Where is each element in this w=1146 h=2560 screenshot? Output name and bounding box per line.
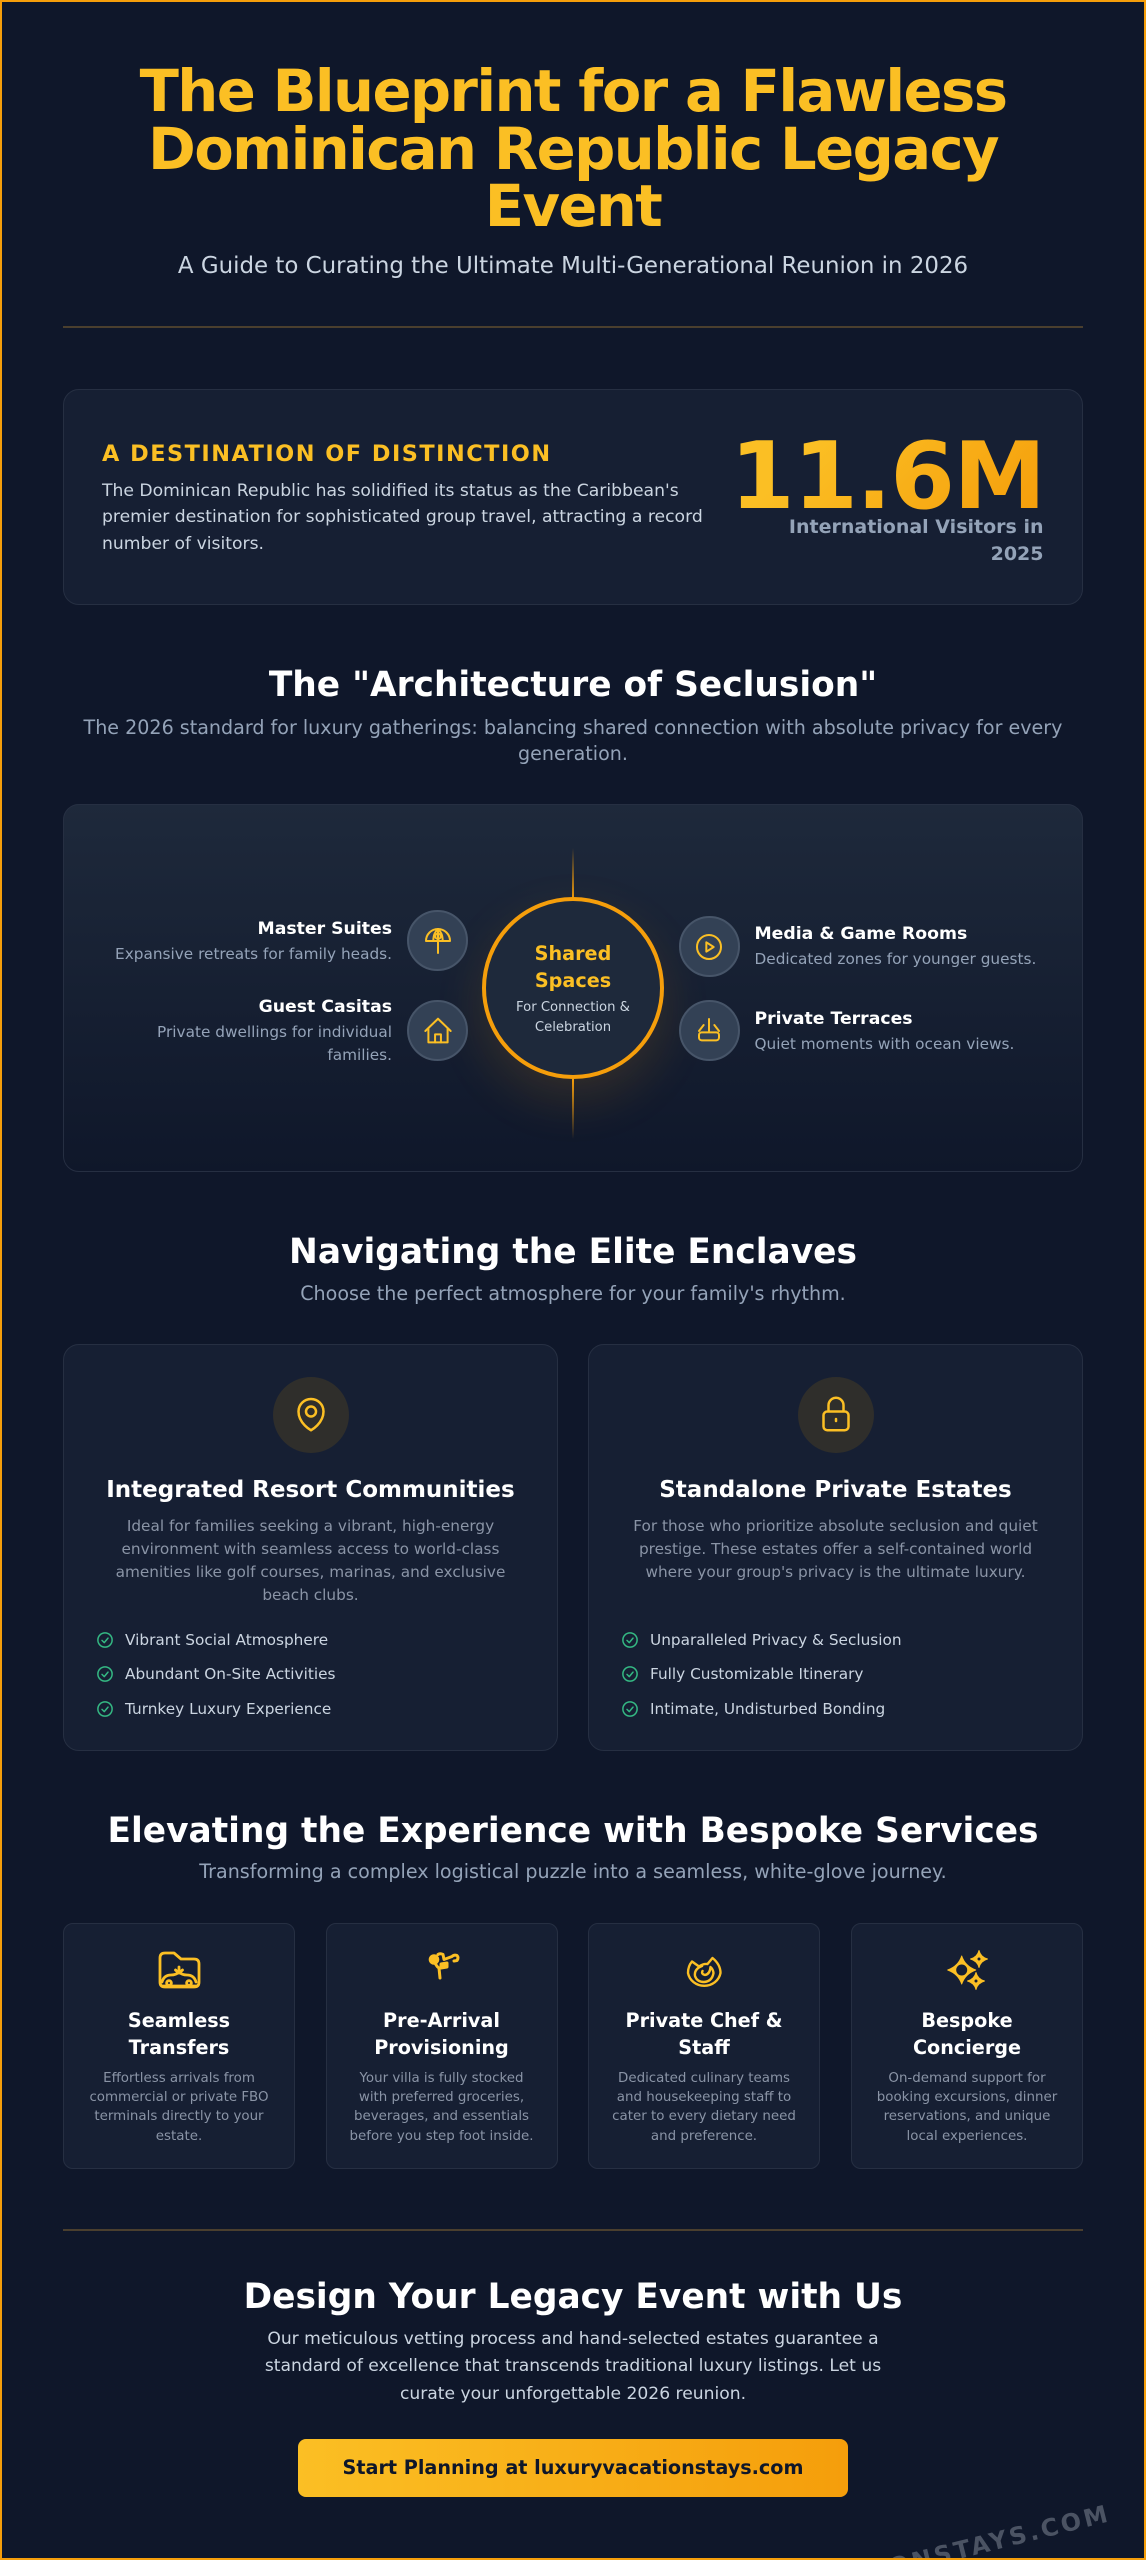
- title: Event: [485, 173, 661, 240]
- title: Dominican Republic Legacy: [148, 116, 998, 183]
- card description: terminals directly to your: [94, 2109, 264, 2124]
- check item: Intimate, Undisturbed Bonding: [650, 1700, 885, 1718]
- heading: bespoke services: Elevating the Experience with Bespoke Services: [108, 1811, 1038, 1851]
- text: closing paragraph: standard of excellence that transcends traditional luxury listings. Let us: [265, 2356, 881, 2376]
- card description: [877, 2071, 1058, 2144]
- panel: standalone private estates: [588, 1344, 1083, 1751]
- item: guest casitas: Private dwellings for individual: [157, 1022, 392, 1040]
- card title: [374, 2009, 509, 2059]
- card title: Concierge: [913, 2036, 1021, 2059]
- card description: and housekeeping staff to: [617, 2090, 791, 2105]
- text: architecture subtitle: [83, 716, 1062, 765]
- text: closing paragraph: Our meticulous vetting process and hand-selected estates guarantee a: [267, 2328, 879, 2348]
- item: guest casitas: [157, 996, 392, 1064]
- title: The Blueprint for a Flawless: [140, 58, 1006, 125]
- card description: cater to every dietary need: [612, 2109, 796, 2124]
- stat label: International Visitors in: [789, 516, 1044, 538]
- card description: prestige. These estates offer a self-contained world: [639, 1540, 1032, 1558]
- item: media and game rooms: Media & Game Rooms: [754, 924, 967, 944]
- check item: Turnkey Luxury Experience: [125, 1700, 331, 1718]
- card description: amenities like golf courses, marinas, and exclusive: [116, 1562, 505, 1580]
- connector: top line: [572, 848, 574, 900]
- text: closing paragraph: curate your unforgettable 2026 reunion.: [400, 2384, 746, 2404]
- card title: Standalone Private Estates: [659, 1477, 1012, 1503]
- card description: [633, 1516, 1038, 1580]
- card title: Bespoke: [921, 2009, 1013, 2032]
- check item: Vibrant Social Atmosphere: [125, 1631, 328, 1649]
- card title: Pre-Arrival: [383, 2009, 500, 2032]
- button: start planning: [298, 2439, 848, 2497]
- card description: where your group's privacy is the ultimate luxury.: [645, 1562, 1026, 1580]
- icon: play: [678, 916, 740, 977]
- central caption: For Connection &: [516, 1000, 630, 1015]
- check item: Fully Customizable Itinerary: [650, 1665, 863, 1683]
- card title: Integrated Resort Communities: [106, 1477, 515, 1503]
- card description: [89, 2071, 269, 2144]
- central circle: shared spaces: [482, 897, 664, 1079]
- panel: pre-arrival provisioning: [326, 1923, 558, 2169]
- check item: Unparalleled Privacy & Seclusion: [650, 1631, 902, 1649]
- card title: [626, 2009, 782, 2059]
- card description: local experiences.: [907, 2129, 1027, 2144]
- card description: commercial or private FBO: [89, 2090, 269, 2105]
- check item: Abundant On-Site Activities: [125, 1665, 335, 1683]
- icon: sparkles: [947, 1950, 988, 1990]
- card description: environment with seamless access to world-class: [122, 1540, 499, 1558]
- card description: estate.: [156, 2129, 202, 2144]
- stat: 11.6M visitors: 11.6M: [730, 422, 1044, 530]
- icon: map pin: [273, 1377, 349, 1453]
- card description: On-demand support for: [888, 2071, 1046, 2086]
- item: media and game rooms: Dedicated zones for younger guests.: [754, 950, 1036, 968]
- icon: terrace: [678, 1000, 740, 1061]
- panel: seamless transfers: [63, 1923, 295, 2169]
- text: architecture subtitle: generation.: [518, 742, 628, 765]
- card description: Ideal for families seeking a vibrant, high-energy: [127, 1516, 494, 1534]
- card description: Effortless arrivals from: [103, 2071, 255, 2086]
- item: guest casitas: families.: [327, 1046, 392, 1064]
- item: private terraces: Quiet moments with ocean views.: [754, 1034, 1014, 1052]
- checklist: [622, 1631, 902, 1718]
- heading: architecture of seclusion: The "Architecture of Seclusion": [269, 665, 877, 705]
- item: master suites: [115, 918, 392, 962]
- connector: bottom line: [572, 1079, 574, 1139]
- panel: integrated resort communities: [63, 1344, 558, 1751]
- card description: [116, 1516, 505, 1604]
- card title: Private Chef &: [626, 2009, 782, 2032]
- title: [140, 58, 1006, 240]
- text: destination description: premier destination for sophisticated group travel, attracting a record: [102, 507, 703, 527]
- item: master suites: Expansive retreats for family heads.: [115, 944, 392, 962]
- panel: a destination of distinction: [63, 389, 1083, 605]
- item: private terraces: [754, 1008, 1014, 1052]
- card title: [913, 2009, 1021, 2059]
- card description: with preferred groceries,: [359, 2090, 524, 2105]
- panel: bespoke concierge: [851, 1923, 1083, 2169]
- panel: architecture diagram: [63, 804, 1083, 1172]
- card description: before you step foot inside.: [350, 2129, 533, 2144]
- card description: beach clubs.: [262, 1586, 359, 1604]
- central title: Spaces: [535, 969, 611, 992]
- text: destination description: number of visitors.: [102, 534, 264, 554]
- icon: flame: [686, 1956, 722, 1987]
- button: start planning: Start Planning at luxuryvacationstays.com: [343, 2456, 803, 2479]
- card description: Your villa is fully stocked: [360, 2071, 523, 2086]
- card description: Dedicated culinary teams: [618, 2071, 790, 2086]
- card title: Seamless: [128, 2009, 230, 2032]
- icon: house: [407, 1000, 468, 1061]
- central caption: Celebration: [535, 1020, 611, 1034]
- card description: booking excursions, dinner: [877, 2090, 1057, 2105]
- text: services subtitle: Transforming a complex logistical puzzle into a seamless, white-glove journey.: [199, 1860, 947, 1883]
- subtitle: A Guide to Curating the Ultimate Multi-Generational Reunion in 2026: [178, 252, 968, 278]
- text: destination description: [102, 480, 703, 554]
- item: master suites: Master Suites: [258, 918, 392, 938]
- card description: and preference.: [651, 2129, 757, 2144]
- heading: design your legacy event: Design Your Legacy Event with Us: [244, 2277, 902, 2317]
- card title: Provisioning: [374, 2036, 509, 2059]
- text: destination description: The Dominican Republic has solidified its status as the Caribbean's: [102, 480, 679, 500]
- card description: [350, 2071, 533, 2144]
- checklist: [97, 1631, 335, 1718]
- card title: Transfers: [129, 2036, 229, 2059]
- card description: For those who prioritize absolute seclusion and quiet: [633, 1516, 1038, 1534]
- heading: elite enclaves: Navigating the Elite Enclaves: [289, 1232, 857, 1272]
- icon: folder with car: [158, 1952, 200, 1988]
- panel: private chef and staff: [588, 1923, 820, 2169]
- text: enclaves subtitle: Choose the perfect atmosphere for your family's rhythm.: [300, 1282, 846, 1305]
- central title: [535, 942, 611, 992]
- card description: beverages, and essentials: [354, 2109, 529, 2124]
- item: media and game rooms: [754, 924, 1036, 968]
- card title: [128, 2009, 230, 2059]
- item: guest casitas: Guest Casitas: [259, 996, 392, 1016]
- card description: [612, 2071, 796, 2144]
- card title: Staff: [678, 2036, 730, 2059]
- central caption: [516, 1000, 630, 1034]
- stat label: [789, 516, 1044, 565]
- text: closing paragraph: [265, 2328, 881, 2404]
- icon: lock: [798, 1377, 874, 1453]
- item: private terraces: Private Terraces: [754, 1008, 913, 1028]
- card description: reservations, and unique: [884, 2109, 1050, 2124]
- central title: Shared: [535, 942, 611, 965]
- text: architecture subtitle: The 2026 standard for luxury gatherings: balancing shared connection with absolute privacy for every: [84, 716, 1062, 738]
- heading: destination: A DESTINATION OF DISTINCTION: [102, 440, 552, 466]
- stat label: 2025: [991, 543, 1044, 565]
- icon: umbrella: [407, 910, 468, 971]
- icon: provisioning: [428, 1952, 460, 1980]
